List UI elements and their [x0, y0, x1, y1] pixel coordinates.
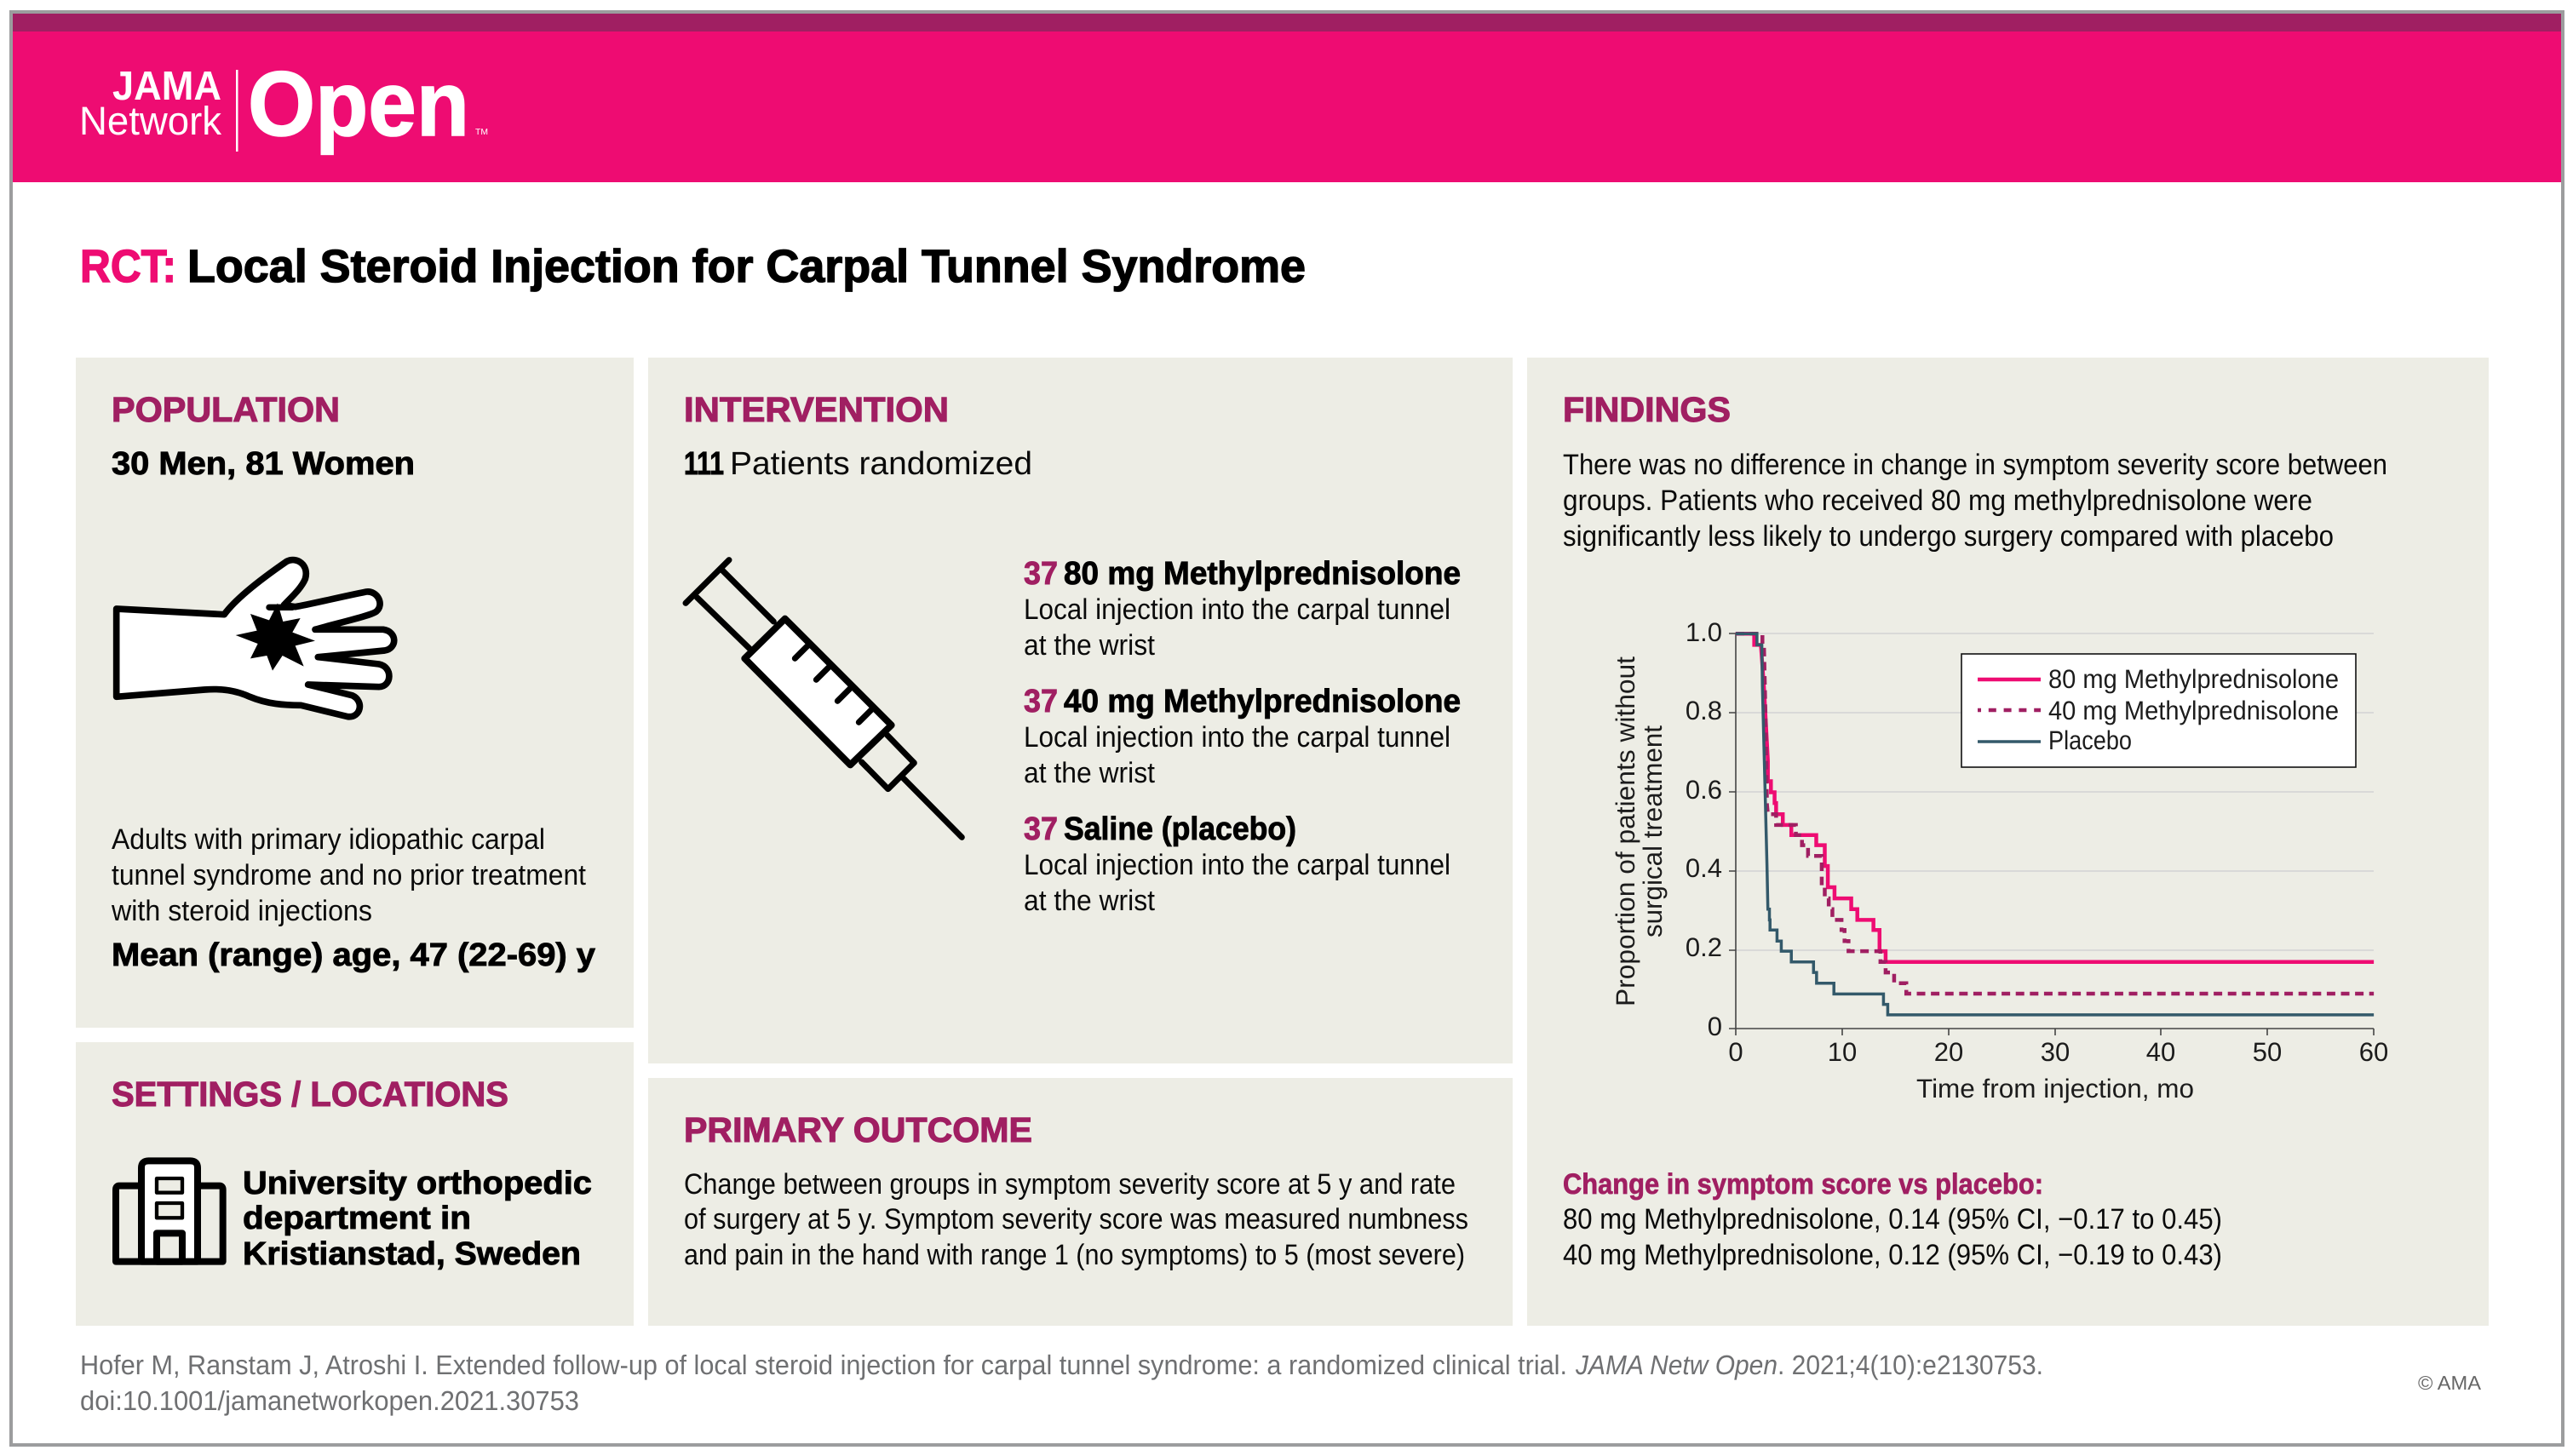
arm: 40 mg: 40 mg Methylprednisolone — [1064, 684, 1461, 719]
location text: University orthopedic — [243, 1166, 592, 1201]
y axis labels: 0.6 — [1686, 775, 1722, 805]
findings summary: groups. Patients who received 80 mg methylprednisolone were — [1563, 484, 2312, 517]
curve: 80 mg methylprednisolone — [1736, 633, 2374, 962]
y axis labels: 1.0 — [1686, 617, 1722, 647]
legend: 80 mg Methylprednisolone — [2048, 664, 2339, 694]
arm: 40 mg: at the wrist — [1024, 757, 1156, 789]
primary outcome description — [684, 1168, 1468, 1271]
population description: Adults with primary idiopathic carpal — [112, 823, 545, 856]
header band — [13, 14, 2561, 182]
logo: JAMA Network Open — [79, 52, 488, 155]
panel: intervention — [648, 358, 1513, 1063]
y axis labels — [1686, 617, 1722, 1041]
y axis labels: 0.8 — [1686, 696, 1722, 725]
citation: Hofer M, Ranstam J, Atroshi I. Extended follow-up of local steroid injection for carpal tunnel syndrome: a randomized clinical trial. — [80, 1350, 1567, 1380]
icon: hand with pain star — [117, 560, 394, 717]
logo: JAMA Network Open: Network — [79, 98, 221, 143]
icon: building — [116, 1161, 223, 1262]
legend — [1961, 654, 2356, 767]
panel: settings / locations — [76, 1042, 634, 1326]
legend: Placebo — [2048, 725, 2132, 755]
x axis labels — [1728, 1037, 2388, 1067]
arm: 40 mg — [1024, 684, 1461, 789]
population description — [111, 823, 587, 927]
panel: population — [76, 358, 634, 1028]
arm: placebo — [1024, 811, 1450, 917]
logo: JAMA Network Open: JAMA — [112, 64, 221, 109]
x axis labels: 50 — [2253, 1037, 2282, 1067]
arm: 80 mg: Local injection into the carpal tunnel — [1024, 593, 1450, 626]
panel: findings — [1527, 358, 2489, 1326]
population counts: 30 Men, 81 Women — [112, 446, 415, 482]
citation — [80, 1350, 2043, 1416]
change in symptom score results — [1563, 1168, 2222, 1271]
legend: 40 mg Methylprednisolone — [2048, 696, 2339, 725]
logo: JAMA Network Open: Open — [248, 52, 469, 155]
x axis labels: 60 — [2359, 1037, 2388, 1067]
heading: intervention: INTERVENTION — [684, 390, 949, 429]
change in symptom score results: 40 mg Methylprednisolone, 0.12 (95% CI, −0.19 to 0.43) — [1563, 1239, 2222, 1271]
location text: department in — [243, 1201, 471, 1236]
arm: 80 mg: at the wrist — [1024, 629, 1156, 662]
primary outcome description: and pain in the hand with range 1 (no symptoms) to 5 (most severe) — [684, 1239, 1465, 1271]
location text: Kristianstad, Sweden — [243, 1236, 581, 1272]
citation: . 2021;4(10):e2130753. — [1778, 1350, 2043, 1380]
change in symptom score results: Change in symptom score vs placebo: — [1563, 1168, 2043, 1201]
population description: tunnel syndrome and no prior treatment — [112, 859, 587, 891]
y axis title: Proportion of patients without — [1611, 656, 1640, 1006]
x axis labels: 10 — [1828, 1037, 1857, 1067]
citation: doi:10.1001/jamanetworkopen.2021.30753 — [80, 1385, 579, 1416]
findings summary — [1563, 449, 2387, 553]
arm: 80 mg — [1024, 556, 1461, 662]
heading: findings: FINDINGS — [1563, 390, 1731, 429]
primary outcome description: Change between groups in symptom severity score at 5 y and rate — [684, 1168, 1456, 1201]
patients randomized: Patients randomized — [730, 446, 1032, 482]
findings summary: significantly less likely to undergo surgery compared with placebo — [1563, 520, 2334, 553]
logo: JAMA Network Open: TM — [475, 128, 488, 137]
citation: JAMA Netw Open — [1575, 1350, 1778, 1380]
heading: settings: SETTINGS / LOCATIONS — [112, 1075, 508, 1114]
arm: 80 mg: 80 mg Methylprednisolone — [1064, 556, 1461, 592]
mean age: Mean (range) age, 47 (22-69) y — [112, 937, 595, 973]
arm: 80 mg: 37 — [1024, 556, 1058, 592]
patients randomized: 111 — [684, 446, 724, 482]
y axis title: surgical treatment — [1638, 725, 1668, 937]
change in symptom score results: 80 mg Methylprednisolone, 0.14 (95% CI, −0.17 to 0.45) — [1563, 1203, 2222, 1235]
y axis title — [1611, 656, 1668, 1006]
primary outcome description: of surgery at 5 y. Symptom severity score was measured numbness — [684, 1203, 1468, 1235]
arm: 40 mg: Local injection into the carpal tunnel — [1024, 721, 1450, 754]
heading: primary outcome: PRIMARY OUTCOME — [684, 1110, 1032, 1149]
panel: primary outcome — [648, 1078, 1513, 1326]
location text — [243, 1166, 592, 1272]
x axis labels: 30 — [2041, 1037, 2070, 1067]
x axis title: Time from injection, mo — [1916, 1074, 2194, 1103]
chart: surgery-free survival curves — [1611, 617, 2388, 1103]
copyright: © AMA — [2418, 1372, 2482, 1394]
arm: placebo: at the wrist — [1024, 885, 1156, 917]
x axis labels: 20 — [1934, 1037, 1963, 1067]
y axis labels: 0 — [1708, 1012, 1722, 1041]
curve: placebo — [1736, 633, 2374, 1015]
title: RCT: — [80, 241, 176, 292]
curve: 40 mg methylprednisolone — [1736, 633, 2374, 994]
population description: with steroid injections — [111, 895, 372, 927]
heading: population: POPULATION — [112, 390, 340, 429]
title: Local Steroid Injection for Carpal Tunnel Syndrome — [187, 241, 1306, 292]
x axis labels: 0 — [1728, 1037, 1743, 1067]
arm: 40 mg: 37 — [1024, 684, 1058, 719]
arm: placebo: Saline (placebo) — [1064, 811, 1296, 847]
icon: syringe — [686, 560, 962, 837]
y axis labels: 0.4 — [1686, 853, 1722, 883]
gridlines and axes — [1729, 633, 2374, 1035]
findings summary: There was no difference in change in symptom severity score between — [1563, 449, 2387, 481]
arm: placebo: 37 — [1024, 811, 1058, 847]
y axis labels: 0.2 — [1686, 932, 1722, 962]
x axis labels: 40 — [2146, 1037, 2175, 1067]
arm: placebo: Local injection into the carpal tunnel — [1024, 849, 1450, 881]
